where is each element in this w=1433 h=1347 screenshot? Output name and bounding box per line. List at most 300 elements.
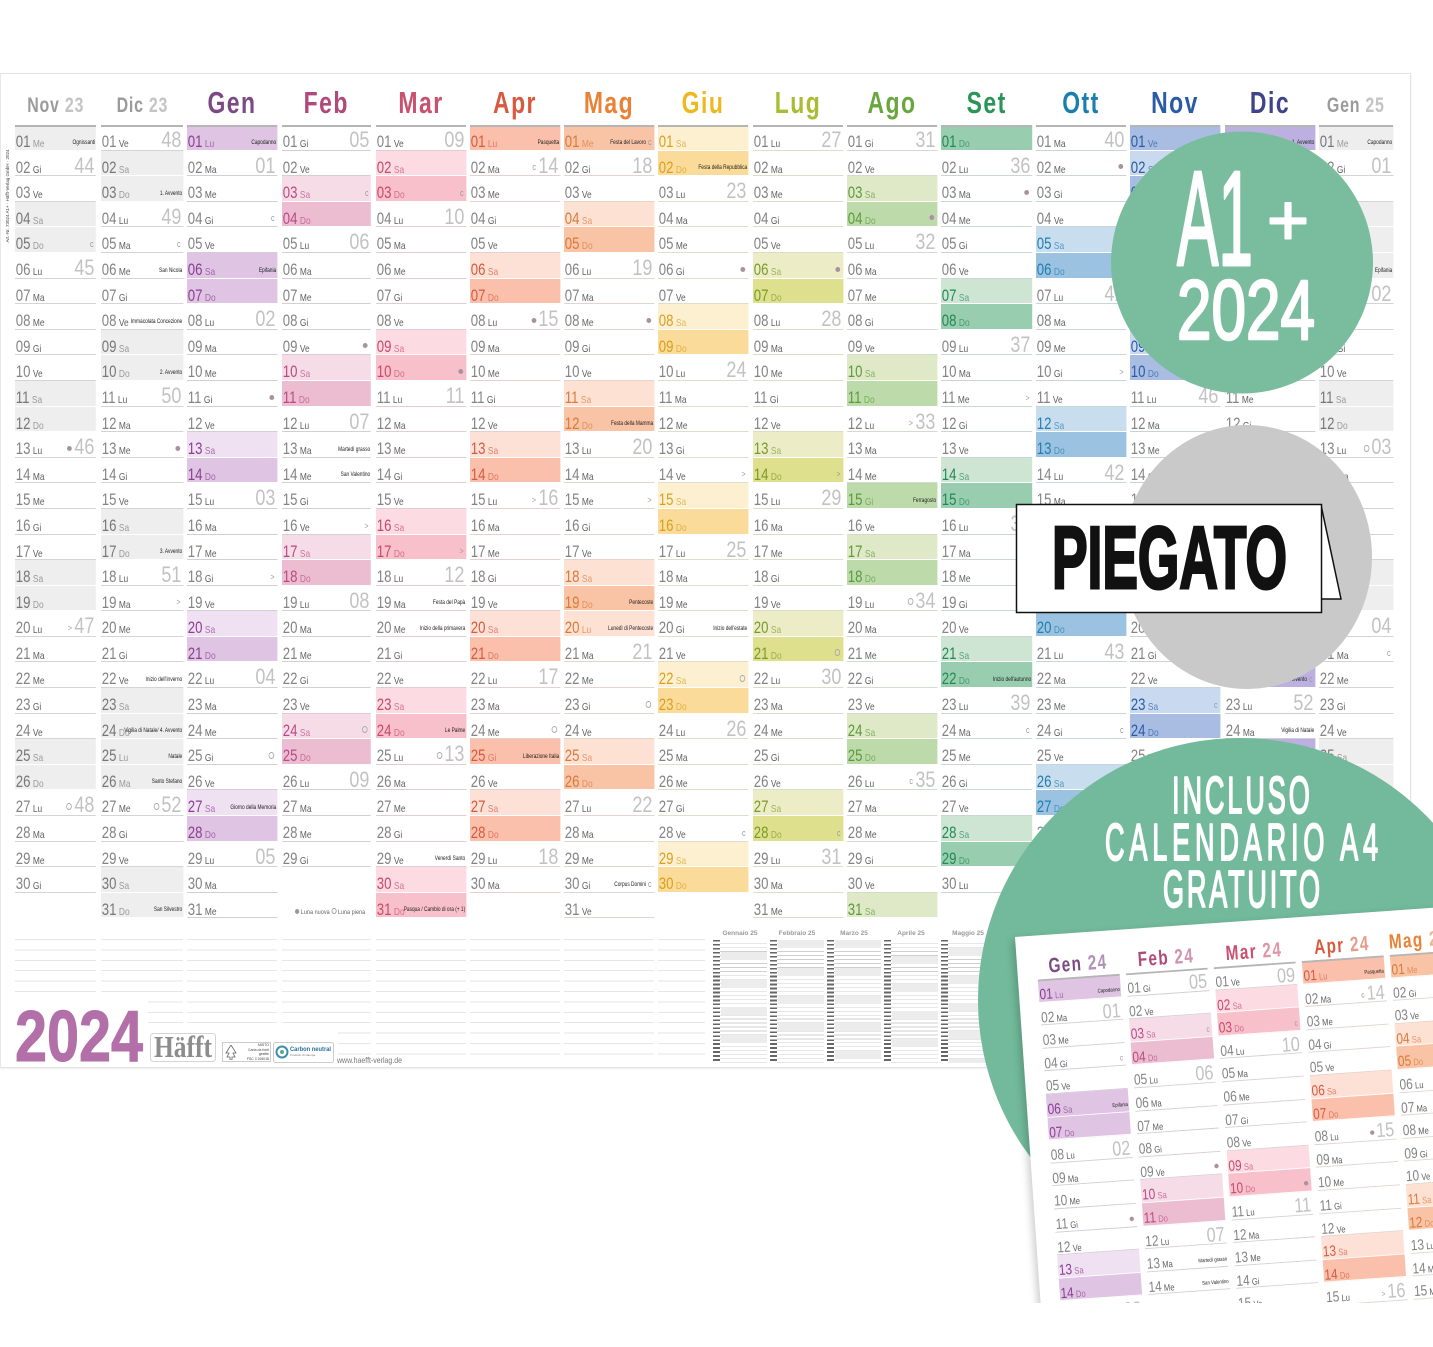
column: Giu: 23Do [659, 696, 687, 714]
column: Ott: 07Lu [1037, 287, 1063, 305]
column: Gen 25: 31Ve [1320, 901, 1347, 919]
badge: A1+ 2024: + [1267, 181, 1309, 261]
sheet column: Feb 24: 05 [1188, 970, 1208, 993]
column: Lug: 15Lu [754, 491, 780, 509]
column: Gen 25: 28Ma [1320, 824, 1349, 842]
column: Nov [1130, 125, 1220, 893]
column: Ott: 16Me [1037, 517, 1066, 535]
column: Set: c [1026, 725, 1030, 735]
column: Gen 25: 10Ve [1320, 363, 1347, 381]
sheet column: Gen 24: 07Do [1049, 1124, 1075, 1141]
column: Gen: 27Sa [188, 798, 215, 816]
column: Nov 23: 29Me [16, 850, 45, 868]
column: Dic: 52 [1293, 690, 1313, 715]
column: Apr: 24Me [471, 722, 500, 740]
column: Lug: 11Gi [754, 389, 778, 407]
heading: Dic 23: Dic 23 [116, 94, 168, 117]
sheet column: Feb 24: 07Me [1137, 1118, 1164, 1135]
column: Giu: 08Sa [659, 312, 686, 330]
sheet column: Apr 24: 14 [1366, 980, 1385, 1004]
column: Nov 23: 05Do [16, 235, 44, 253]
column: Lug: 03Me [754, 184, 783, 202]
column: Ago: 23Ve [848, 696, 875, 714]
column: Dic: 17Ma [1226, 542, 1255, 560]
column: Nov: 26Ma [1131, 773, 1160, 791]
column: Mar: c [460, 188, 464, 198]
column: Lug: 31Me [754, 901, 783, 919]
column: Feb: 06 [349, 229, 369, 254]
column: Mag: 20 [632, 434, 652, 459]
column: Dic 23: 21Gi [102, 645, 127, 663]
column: Ago: 27Ma [848, 798, 877, 816]
column: Set: 38 [1010, 511, 1030, 536]
sheet column: Apr 24: 03Me [1306, 1013, 1333, 1030]
column: Feb [282, 125, 371, 867]
column: Dic 23: 28Gi [102, 824, 127, 842]
column: Lug: 04Gi [754, 210, 779, 228]
sheet column: Apr 24: Pasquetta [1364, 969, 1384, 975]
column: Feb: 22Gi [283, 670, 308, 688]
column: Dic 23: 22Ve [102, 670, 129, 688]
column: Dic: 27Ve [1226, 798, 1253, 816]
column: Ago: 01Gi [848, 133, 873, 151]
sheet column: Gen 24 [1038, 974, 1144, 1324]
column: Ago: 26Lu [848, 773, 874, 791]
column: Set: 37 [1010, 332, 1030, 357]
badge: FSC [222, 1042, 271, 1062]
column: Set: 39 [1010, 690, 1030, 715]
column: Giu: 27Gi [659, 798, 684, 816]
column: Gen: 25Gi [188, 747, 213, 765]
column: Nov 23: 20Lu [16, 619, 42, 637]
column: Set: 19Gi [942, 594, 967, 612]
mini calendar: Febbraio 25 [770, 940, 824, 1063]
column: Gen 25 [1319, 125, 1393, 918]
column: Gen: 05 [255, 844, 275, 869]
column: Nov: 27Me [1131, 798, 1160, 816]
column: Nov 23: 03Ve [16, 184, 43, 202]
sheet column: Gen 24: 13Sa [1058, 1262, 1084, 1279]
column: Gen: 17Me [188, 542, 217, 560]
heading: Mag: Mag [584, 85, 634, 120]
column: Ott: 03Gi [1037, 184, 1062, 202]
column: Mag: 23Gi [565, 696, 590, 714]
column: Mar: 12 [444, 562, 464, 587]
column: Lug: 25Gi [754, 747, 779, 765]
badge: incluso calendario A4 gratuito: CALENDARIO A4 [1105, 812, 1378, 871]
column: Gen: 07Do [188, 287, 216, 305]
column: Apr: 27Sa [471, 798, 498, 816]
column: Giu: 25 [726, 536, 746, 562]
column: Dic 23: 04Lu [102, 210, 128, 228]
column: Lug: 22Lu [754, 670, 780, 688]
column: Mag: 27Lu [565, 798, 591, 816]
column: Ago: 06Ma [848, 261, 877, 279]
column: Dic 23: > [176, 597, 181, 607]
sheet column: Apr 24: 05Ve [1309, 1059, 1335, 1076]
column: Nov 23: 24Ve [16, 722, 43, 740]
column: Feb: 17Sa [283, 542, 310, 560]
column: Set: 17Ma [942, 542, 971, 560]
column: Nov: 05Ma [1131, 235, 1160, 253]
column: Ago: 17Sa [848, 542, 875, 560]
column: Set: 30Lu [942, 875, 968, 893]
column: Dic 23: 27Me [102, 798, 131, 816]
column: Mag: 24Ve [565, 722, 592, 740]
column: Feb: 07 [349, 409, 369, 434]
column: Set: 06Ve [942, 261, 969, 279]
badge: FSC: FSC C106018 [247, 1056, 269, 1060]
sheet column: Feb 24: 07 [1206, 1222, 1225, 1246]
column: Apr: 11Gi [471, 389, 495, 407]
column: Ott: 12Sa [1037, 415, 1064, 433]
column: Ott: 19Sa [1037, 594, 1064, 612]
column: Ago: 03Sa [848, 184, 875, 202]
column: Nov: c [1214, 700, 1218, 710]
column: Dic 23: 1. Avvento [160, 191, 182, 197]
column: Nov 23: 07Ma [16, 287, 45, 305]
column: Dic: 24Ma [1226, 722, 1255, 740]
badge: Carbon neutral: Carbon neutral [290, 1047, 331, 1053]
column: Lug: c [837, 828, 841, 838]
column: Mar: 07Gi [377, 287, 402, 305]
sheet column: Feb 24: 14Me [1148, 1278, 1175, 1295]
column: Mar: 08Ve [377, 312, 404, 330]
column: Mag: 22Me [565, 670, 594, 688]
mini calendar: Gennaio 25 [713, 940, 767, 1063]
column: Mar: 20Me [377, 619, 406, 637]
column: Nov: 09Sa [1131, 338, 1158, 356]
sheet column: Apr 24: 01Lu [1303, 967, 1328, 984]
column: Gen: 19Ve [188, 594, 215, 612]
sheet column: Mag 24: 11Sa [1407, 1191, 1432, 1208]
sheet column: Apr 24: 06Sa [1311, 1082, 1337, 1099]
column: Feb: 03Sa [283, 184, 310, 202]
sheet column: Feb 24: 10Sa [1141, 1186, 1167, 1204]
column: Lug: 24Me [754, 722, 783, 740]
column: Mar: 24Do [377, 722, 405, 740]
column: Dic 23: 18Lu [102, 568, 128, 586]
column: Feb: 27Ma [283, 798, 312, 816]
column: Set: 36 [1010, 153, 1030, 178]
sheet column: Apr 24: 13Sa [1322, 1243, 1348, 1260]
column: Mar: Festa del Papà [433, 600, 465, 606]
sheet column: Gen 24: 09Ma [1052, 1170, 1079, 1187]
column: Mag: Lunedì di Pentecoste [608, 626, 653, 632]
column: Set: 01Do [942, 133, 970, 151]
column: Nov: 25Lu [1131, 747, 1157, 765]
column: Giu: 14Ve [659, 466, 686, 484]
column: Ott: 15Ma [1037, 491, 1066, 509]
column: Dic 23: Inizio dell'inverno [146, 677, 182, 683]
column: Gen: 13Sa [188, 440, 215, 458]
column: Dic 23: 01Ve [102, 133, 129, 151]
column: Giu: 29Sa [659, 850, 686, 868]
column: Gen: 14Do [188, 466, 216, 484]
column: Gen 25: Epifania [1375, 268, 1392, 274]
badge: incluso calendario A4 gratuito: INCLUSO [1172, 765, 1310, 824]
column: Feb: 28Me [283, 824, 312, 842]
column: Dic 23: 31Do [102, 901, 130, 919]
column: Dic 23: Natale [168, 754, 182, 760]
column: Dic 23: 13Me [102, 440, 131, 458]
column: Mar: 12Ma [377, 415, 406, 433]
column: Gen 25: 15Me [1320, 491, 1349, 509]
sheet column: Mar 24: 10Do [1229, 1180, 1256, 1197]
column: Gen 25: 08Me [1320, 312, 1349, 330]
column: Dic: 11Me [1226, 389, 1254, 407]
column: Mag: Festa del Lavoro [610, 140, 646, 146]
column: Feb: 12Lu [283, 415, 309, 433]
column: Dic 23: 2. Avvento [160, 370, 182, 376]
column: Lug [753, 125, 843, 918]
column: Mar [376, 125, 466, 918]
column: Mag: 19 [632, 255, 652, 280]
column: Dic: San Nicola [1291, 268, 1314, 274]
column: Apr: 05Ve [471, 235, 498, 253]
column: Gen: 05Ve [188, 235, 215, 253]
column: Nov 23: c [90, 239, 94, 249]
column: Gen: 10Me [188, 363, 217, 381]
column: Feb: > [364, 520, 369, 530]
sheet column: Gen 24: 04Gi [1044, 1055, 1068, 1072]
sheet column: Mar 24: 12Ma [1233, 1226, 1260, 1243]
column: Mag: 12Do [565, 415, 593, 433]
sheet column: Mag 24: 07Ma [1401, 1099, 1428, 1116]
column: Mar: 23Sa [377, 696, 404, 714]
column: Dic: 01 [1293, 869, 1313, 894]
column: Feb: 08Gi [283, 312, 308, 330]
column: Mag: 04Sa [565, 210, 592, 228]
column: Gen: 01 [255, 153, 275, 178]
column: Mag: Pentecoste [629, 600, 653, 606]
column: Dic: Vigilia di Natale [1281, 728, 1314, 734]
column: Gen: 26Ve [188, 773, 215, 791]
column: Ott: 22Ma [1037, 670, 1066, 688]
sheet column: Apr 24: 07Do [1313, 1105, 1339, 1122]
sheet column: Mar 24: 01Ve [1215, 974, 1240, 991]
column: Mar: 13Me [377, 440, 406, 458]
column: Lug: 07Do [754, 287, 782, 305]
column: Gen 25: c [1387, 648, 1391, 658]
column: Feb: 11Do [283, 389, 310, 407]
column: Dic: 05Gi [1226, 235, 1251, 253]
column: Nov 23: 15Me [16, 491, 45, 509]
column: Set: 10Ma [942, 363, 971, 381]
badge: incluso calendario A4 gratuito: GRATUITO [1163, 859, 1320, 918]
column: Gen 25: 07Ma [1320, 287, 1349, 305]
A4 calendar sheet, rotated and cropped [1010, 908, 1433, 1303]
sheet column: Apr 24: 15 [1375, 1118, 1395, 1142]
column: Dic: 22Do [1226, 670, 1254, 688]
column: Lug: 28 [821, 306, 841, 331]
column: Gen 25: 30Gi [1320, 875, 1345, 893]
column: Giu: 15Sa [659, 491, 686, 509]
column: Dic 23: 51 [161, 562, 181, 587]
badge: FSC: MISTO [258, 1043, 269, 1047]
sheet column: Apr 24: 09Ma [1316, 1151, 1343, 1168]
column: Dic 23: 12Ma [102, 415, 131, 433]
column: Mar: 06Me [377, 261, 406, 279]
column: Giu: 21Ve [659, 645, 686, 663]
column: Mar: 09Sa [377, 338, 404, 356]
column: Feb: 13Ma [283, 440, 312, 458]
column: Dic: 16Lu [1226, 517, 1252, 535]
heading: Maggio 25: Maggio 25 [952, 930, 984, 937]
column: Ago: 14Me [848, 466, 877, 484]
sheet column: Mar 24: 11Lu [1231, 1203, 1255, 1220]
column: Mag: 20Lu [565, 619, 591, 637]
column: Mar: 03Do [377, 184, 405, 202]
column: Nov: 24Do [1131, 722, 1159, 740]
column: Dic 23: 50 [161, 383, 181, 408]
column: Set: 04Me [942, 210, 971, 228]
column: Ott: 43 [1104, 639, 1124, 664]
column: Ott: 26Sa [1037, 773, 1064, 791]
column: Giu [658, 125, 748, 893]
column: Gen 25: 16Gi [1320, 517, 1345, 535]
sheet column: Mar 24: 11 [1293, 1193, 1312, 1217]
column: Dic: 26Gi [1226, 773, 1251, 791]
sheet column: Gen 24: 06Sa [1047, 1101, 1073, 1118]
column: Ott: 23Me [1037, 696, 1066, 714]
column: Lug: 30 [821, 664, 841, 689]
column: Feb: 23Ve [283, 696, 310, 714]
column: Set: 28Sa [942, 824, 969, 842]
column: Apr: Pasquetta [538, 140, 559, 146]
column: Mag: 16Gi [565, 517, 590, 535]
column: Nov 23: 45 [74, 255, 94, 280]
column: Lug: 18Gi [754, 568, 779, 586]
column: Dic 23: 09Sa [102, 338, 129, 356]
column: Nov: 06Me [1131, 261, 1160, 279]
column: Giu: > [741, 469, 746, 479]
sheet column: Mar 24: 13Me [1234, 1249, 1261, 1266]
column: Feb: 01Gi [283, 133, 308, 151]
column: Dic: 14Sa [1226, 466, 1253, 484]
column: Gen 25: 03 [1371, 434, 1391, 459]
column: Set: 05Gi [942, 235, 967, 253]
sheet column: Feb 24: c [1206, 1024, 1210, 1033]
badge: A1+ 2024 [1111, 132, 1373, 394]
column: Mag: 26Do [565, 773, 593, 791]
heading: Feb: Feb [304, 85, 349, 120]
sheet column: Mag 24: 06Lu [1399, 1076, 1424, 1093]
column: Nov: 28Gi [1131, 824, 1156, 842]
column: Ott: 11Ve [1037, 389, 1063, 407]
column: Apr: 23Ma [471, 696, 500, 714]
column: Mag: Corpus Domini [614, 882, 646, 888]
column: Apr: 01Lu [471, 133, 497, 151]
column: Lug: 29Lu [754, 850, 780, 868]
column: Dic: 10Ma [1226, 363, 1255, 381]
column: Giu: 25Ma [659, 747, 688, 765]
column: Set [941, 125, 1032, 893]
column: Gen: Capodanno [251, 140, 276, 146]
website url: www.haefft-verlag.de [337, 1055, 402, 1065]
column: Ago: 33 [915, 409, 935, 434]
column: Gen: 23Ma [188, 696, 217, 714]
column: Gen: 24Me [188, 722, 217, 740]
column: Gen: > [270, 572, 275, 582]
column: Giu: 24 [726, 357, 746, 382]
column: Lug: 20Sa [754, 619, 781, 637]
column: Mar: 28Gi [377, 824, 402, 842]
column: Apr: 15 [538, 306, 558, 331]
column: Ott: 01Ma [1037, 133, 1066, 151]
column: Mar: 10 [444, 204, 464, 229]
column: Dic: 2. Avvento [1292, 319, 1314, 325]
column: Feb: 07Me [283, 287, 312, 305]
sheet column: Feb 24: 04Do [1132, 1049, 1158, 1066]
column: Nov: 17Do [1131, 542, 1159, 560]
column: Gen 25: 25Sa [1320, 747, 1347, 765]
column: Mag: 28Ma [565, 824, 594, 842]
column: Feb: 05Lu [283, 235, 309, 253]
column: Apr: 30Ma [471, 875, 500, 893]
column: Apr: 16 [538, 485, 558, 510]
column: Mar: 09 [444, 127, 464, 152]
column: Lug: 26Ve [754, 773, 781, 791]
column: Gen 25: 05Do [1320, 235, 1348, 253]
sheet column: Apr 24: 10Me [1317, 1174, 1344, 1191]
column: Nov 23: 21Ma [16, 645, 45, 663]
sheet column: Apr 24: 12Ve [1321, 1220, 1346, 1237]
column: Apr: 10Me [471, 363, 500, 381]
badge: Carbon neutral: Prodotto di stampa [290, 1053, 316, 1057]
column: Gen: 11Gi [188, 389, 212, 407]
column: Dic [1225, 125, 1315, 918]
column: Mag: 25Sa [565, 747, 592, 765]
column: Ott: c [1120, 725, 1124, 735]
sheet column: Gen 24: 01Lu [1039, 986, 1064, 1003]
column: Set: Inizio dell'autunno [993, 677, 1031, 683]
sheet column: Gen 24: Capodanno [1097, 987, 1120, 994]
column: Lug: 09Ma [754, 338, 783, 356]
column: Nov: 10Do [1131, 363, 1159, 381]
column: Gen: 06Sa [188, 261, 215, 279]
heading: Gen 25: Gen 25 [1327, 94, 1385, 117]
sheet column: Mar 24: 07Gi [1225, 1111, 1249, 1128]
column: Gen: 01Lu [188, 133, 214, 151]
column: Ago: 22Gi [848, 670, 873, 688]
column: Lug: 27Sa [754, 798, 781, 816]
column: Gen 25: 17Ve [1320, 542, 1347, 560]
sheet column: Mar 24: 14Gi [1236, 1272, 1260, 1289]
column: Ago: 05Lu [848, 235, 874, 253]
sheet column: Feb 24: 09Ve [1140, 1163, 1165, 1181]
column: Gen [187, 125, 277, 918]
column: Ago: 13Ma [848, 440, 877, 458]
column: Lug: 29 [821, 485, 841, 510]
column: Set: 29Do [942, 850, 970, 868]
sheet column: Mar 24 [1214, 962, 1320, 1312]
sheet column: Mag 24: 04Sa [1396, 1030, 1421, 1047]
column: Set: 11Me [942, 389, 970, 407]
column: Mar: 27Me [377, 798, 406, 816]
column: Ago: 30Ve [848, 875, 875, 893]
column: Lug: 13Sa [754, 440, 781, 458]
column: Giu: 13Gi [659, 440, 684, 458]
column: Apr: c [532, 162, 536, 172]
column: Gen 25: 02 [1371, 281, 1391, 306]
column: Nov: 03Do [1131, 184, 1159, 202]
column: Apr: 08Lu [471, 312, 497, 330]
column: Giu: c [742, 828, 746, 838]
column: Apr: 15Lu [471, 491, 497, 509]
column: Dic: 31Ma [1226, 901, 1255, 919]
column: Nov: 18Lu [1131, 568, 1157, 586]
